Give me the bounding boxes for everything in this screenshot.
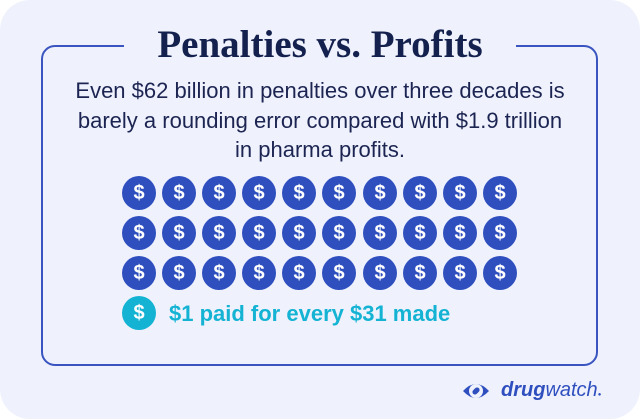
icon grid: 30 dollar coins: $	[253, 182, 265, 204]
icon: teal coin: $	[133, 302, 145, 324]
icon grid: 30 dollar coins: $	[173, 222, 185, 244]
icon grid: 30 dollar coins: $	[414, 182, 426, 204]
text block: description: Even $62 billion in penalties over three decades is	[75, 78, 565, 103]
icon grid: 30 dollar coins	[122, 176, 517, 290]
icon grid: 30 dollar coins: $	[213, 222, 225, 244]
title: Penalties vs. Profits	[157, 23, 483, 66]
icon grid: 30 dollar coins: $	[133, 222, 145, 244]
icon grid: 30 dollar coins: $	[494, 222, 506, 244]
icon grid: 30 dollar coins: $	[414, 262, 426, 284]
logo: drugwatch	[463, 379, 601, 401]
icon grid: 30 dollar coins: $	[454, 262, 466, 284]
icon grid: 30 dollar coins: $	[374, 222, 386, 244]
icon: teal coin	[122, 296, 156, 330]
icon grid: 30 dollar coins: $	[213, 182, 225, 204]
icon grid: 30 dollar coins: $	[454, 222, 466, 244]
icon grid: 30 dollar coins: $	[374, 262, 386, 284]
logo text: drugwatch●	[501, 379, 601, 401]
icon: eye with pill	[463, 384, 489, 398]
icon grid: 30 dollar coins: $	[133, 262, 145, 284]
legend	[122, 296, 450, 330]
icon grid: 30 dollar coins: $	[213, 262, 225, 284]
text block: description	[75, 78, 565, 162]
icon grid: 30 dollar coins: $	[414, 222, 426, 244]
icon grid: 30 dollar coins: $	[494, 182, 506, 204]
icon grid: 30 dollar coins: $	[173, 262, 185, 284]
icon grid: 30 dollar coins: $	[494, 262, 506, 284]
panel: framed box	[41, 45, 598, 366]
icon grid: 30 dollar coins: $	[333, 182, 345, 204]
icon grid: 30 dollar coins: $	[293, 262, 305, 284]
icon grid: 30 dollar coins: $	[454, 182, 466, 204]
legend text: $1 paid for every $31 made	[169, 301, 450, 326]
icon grid: 30 dollar coins: $	[253, 262, 265, 284]
text block: description: barely a rounding error compared with $1.9 trillion	[78, 108, 562, 132]
text block: description: in pharma profits.	[235, 137, 405, 162]
icon grid: 30 dollar coins: $	[374, 182, 386, 204]
icon grid: 30 dollar coins: $	[293, 182, 305, 204]
icon grid: 30 dollar coins: $	[333, 262, 345, 284]
icon grid: 30 dollar coins: $	[333, 222, 345, 244]
icon grid: 30 dollar coins: $	[293, 222, 305, 244]
icon grid: 30 dollar coins: $	[253, 222, 265, 244]
icon grid: 30 dollar coins: $	[173, 182, 185, 204]
icon grid: 30 dollar coins: $	[133, 182, 145, 204]
